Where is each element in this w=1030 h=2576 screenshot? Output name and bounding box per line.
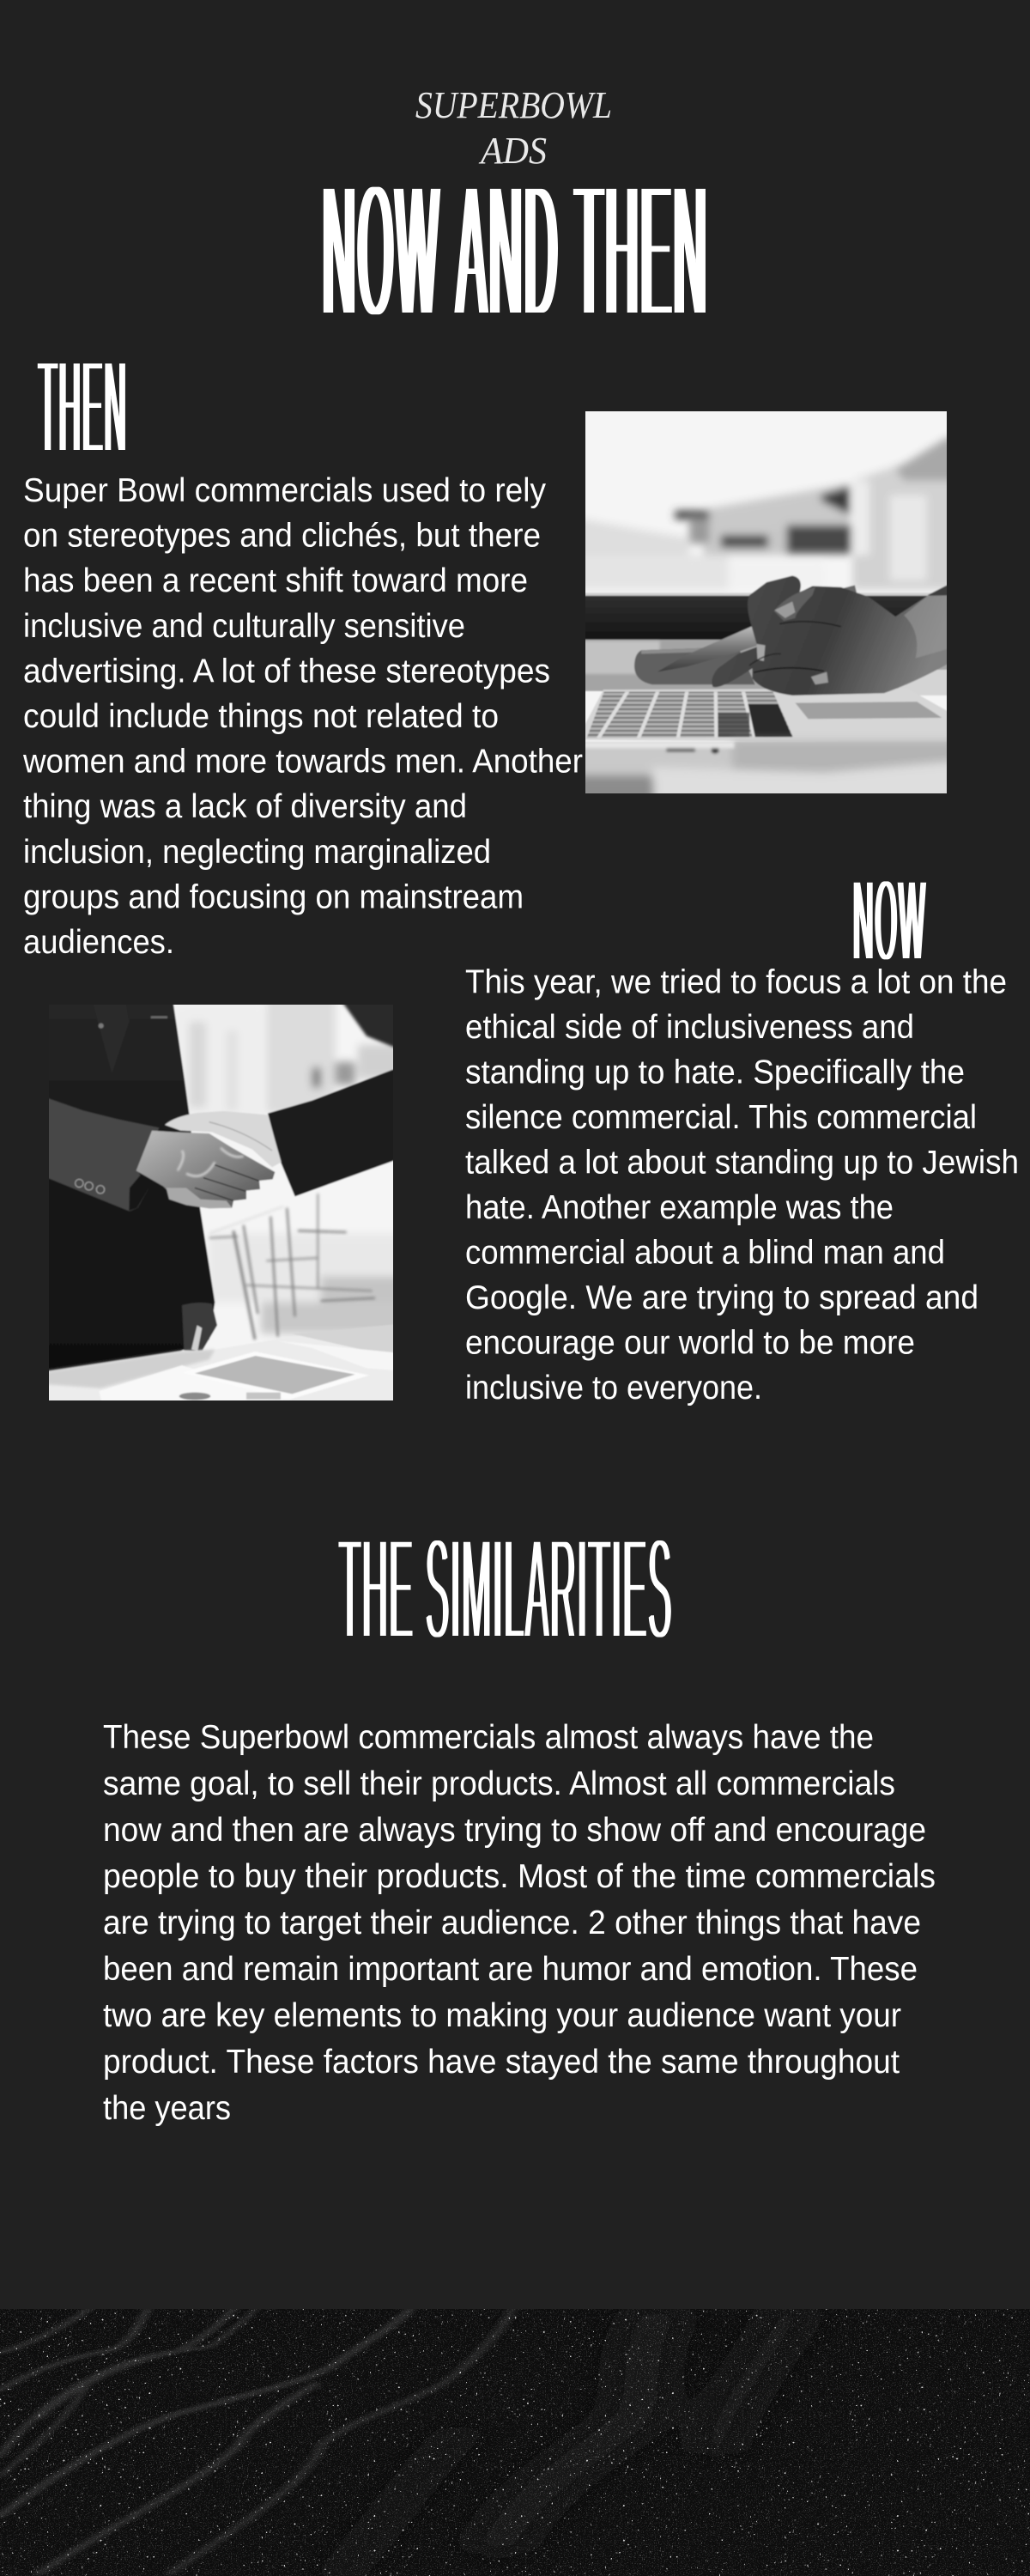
text block: now: This year, we tried to focus a lot on the <box>465 963 1007 1001</box>
text block: similarities: same goal, to sell their products. Almost all commercials <box>103 1765 895 1802</box>
text block: then: inclusive and culturally sensitive <box>23 608 465 645</box>
photo: hand with pen over laptop <box>585 411 947 793</box>
text block: then: audiences. <box>23 924 174 961</box>
panel: the similarities <box>103 1508 936 2127</box>
panel: then: THEN <box>39 332 128 481</box>
text block: then: women and more towards men. Another <box>22 744 583 781</box>
kicker: superbowl ads: ADS <box>478 130 547 172</box>
text block: now: encourage our world to be more <box>465 1324 915 1362</box>
text block: then: Super Bowl commercials used to rely <box>23 472 547 509</box>
text block: similarities: product. These factors have stayed the same throughout <box>103 2044 900 2081</box>
text block: then: on stereotypes and clichés, but there <box>23 518 541 555</box>
text block: then <box>22 472 583 961</box>
footer image: dark sand ripples <box>0 2309 1030 2576</box>
text block: similarities: are trying to target their audience. 2 other things that have <box>103 1905 921 1941</box>
text block: then: groups and focusing on mainstream <box>23 878 524 915</box>
text block: similarities: two are key elements to making your audience want your <box>103 1997 901 2034</box>
title block <box>323 84 709 358</box>
panel: then <box>22 332 955 961</box>
text block: similarities: These Superbowl commercials almost always have the <box>103 1719 874 1756</box>
text block: similarities: been and remain important are humor and emotion. These <box>103 1951 918 1988</box>
text block: now: commercial about a blind man and <box>465 1235 945 1271</box>
text block: then: has been a recent shift toward more <box>23 562 528 599</box>
text block: now <box>465 963 1019 1406</box>
text block: similarities: people to buy their products. Most of the time commercials <box>103 1858 936 1895</box>
text block: then: advertising. A lot of these stereotypes <box>23 653 550 690</box>
text block: similarities: now and then are always trying to show off and encourage <box>103 1812 926 1849</box>
kicker: superbowl ads <box>415 84 612 172</box>
text block: similarities <box>103 1719 936 2127</box>
text block: now: hate. Another example was the <box>465 1189 894 1226</box>
panel: now <box>40 855 1019 1409</box>
text block: now: ethical side of inclusiveness and <box>465 1009 914 1046</box>
photo: business handshake <box>49 1005 393 1400</box>
text block: similarities: the years <box>103 2090 231 2127</box>
text block: then: inclusion, neglecting marginalized <box>23 834 491 871</box>
text block: now: talked a lot about standing up to Jewish <box>465 1144 1019 1182</box>
text block: then: thing was a lack of diversity and <box>23 788 467 825</box>
text block: now: standing up to hate. Specifically the <box>465 1054 965 1091</box>
text block: now: silence commercial. This commercial <box>465 1099 977 1136</box>
kicker: superbowl ads: SUPERBOWL <box>415 84 612 126</box>
text block: now: inclusive to everyone. <box>465 1370 762 1406</box>
text block: now: Google. We are trying to spread and <box>465 1279 978 1316</box>
text block: then: could include things not related to <box>23 698 499 735</box>
